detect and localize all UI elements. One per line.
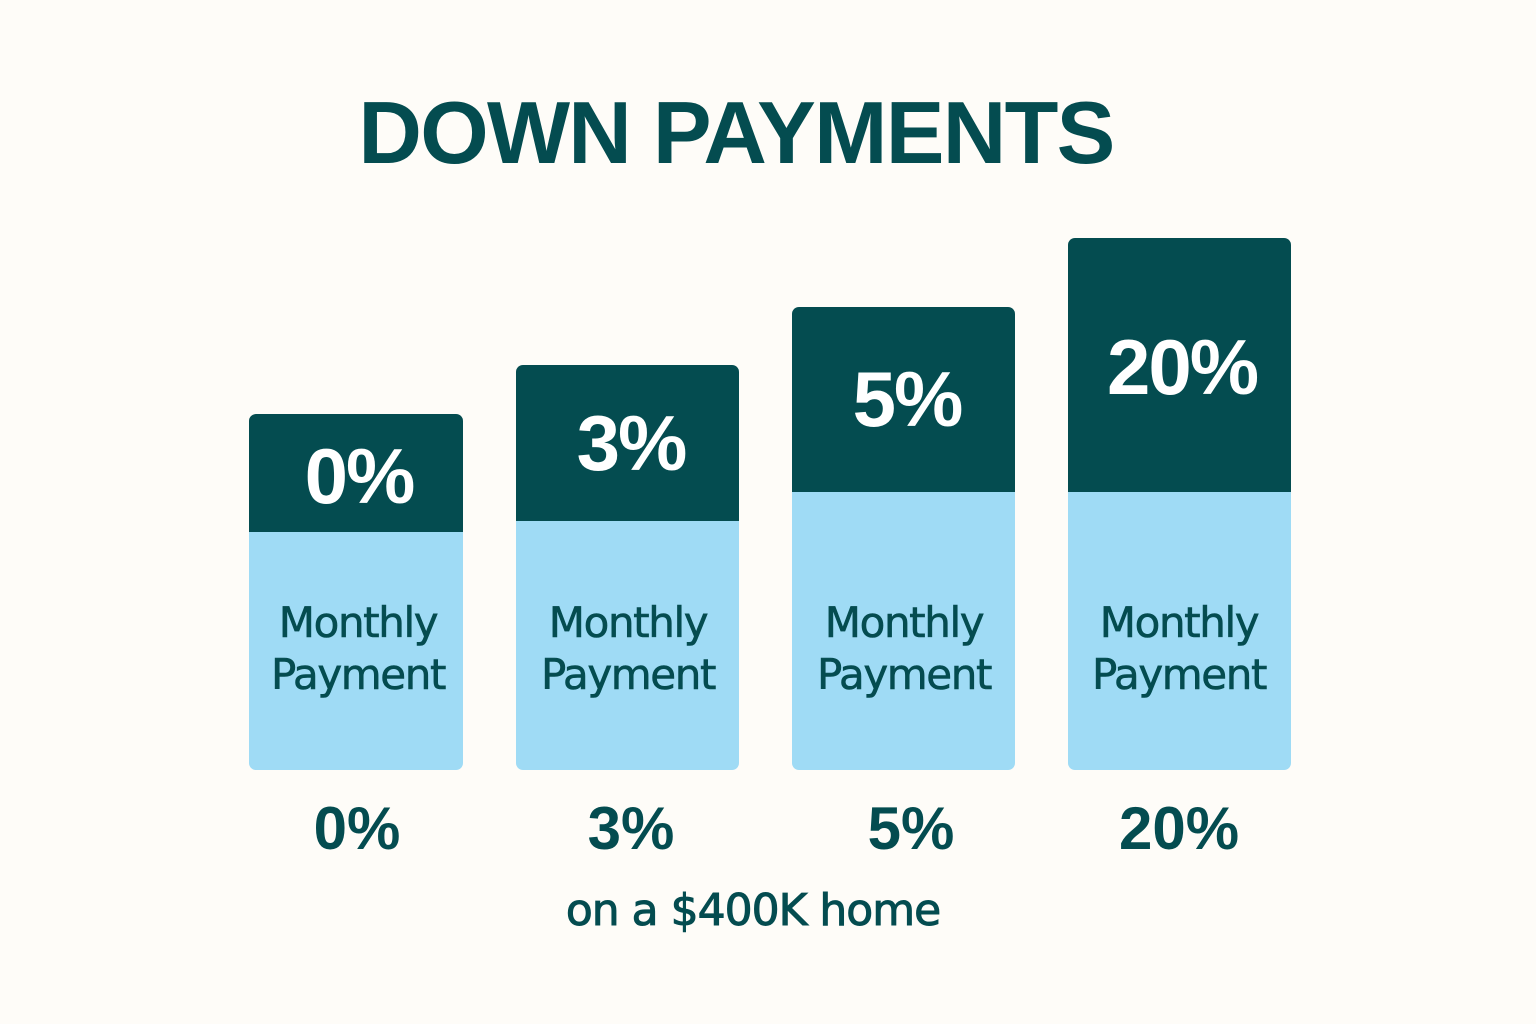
bar label 0%: Payment (271, 650, 445, 699)
title: DOWN PAYMENTS (358, 83, 1114, 182)
bar label 3% (541, 598, 716, 699)
bar 0% down payment segment (249, 414, 463, 532)
bar label 5%: Payment (817, 650, 991, 699)
bar label 5%: Monthly (825, 598, 983, 647)
bar 0% monthly payment segment (249, 532, 463, 770)
caption: on a $400K home (566, 885, 940, 936)
axis label 20%: 20% (1119, 795, 1239, 862)
bar 20% down payment segment (1068, 238, 1291, 492)
bar 3% monthly payment segment (516, 521, 739, 770)
bar: 3% (516, 365, 739, 770)
bar label 0% (271, 598, 446, 699)
axis label 3%: 3% (588, 795, 674, 862)
bar label 3%: Monthly (549, 598, 707, 647)
bar: 20% (1068, 238, 1291, 770)
bar label 3%: Payment (541, 650, 715, 699)
bar 5% down payment segment (792, 307, 1015, 492)
bar label 0%: Monthly (279, 598, 437, 647)
bar value 20%: 20% (1107, 323, 1257, 411)
bar label 20%: Payment (1092, 650, 1266, 699)
bar: 0% (249, 414, 463, 770)
bar 5% monthly payment segment (792, 492, 1015, 770)
bar value 5%: 5% (853, 355, 961, 443)
bar label 20%: Monthly (1100, 598, 1258, 647)
bar label 5% (817, 598, 992, 699)
bar 3% down payment segment (516, 365, 739, 521)
axis label 0%: 0% (314, 795, 400, 862)
bar value 3%: 3% (577, 399, 685, 487)
bar 20% monthly payment segment (1068, 492, 1291, 770)
axis label 5%: 5% (868, 795, 954, 862)
bar label 20% (1092, 598, 1267, 699)
bar value 0%: 0% (305, 432, 413, 520)
bar: 5% (792, 307, 1015, 770)
